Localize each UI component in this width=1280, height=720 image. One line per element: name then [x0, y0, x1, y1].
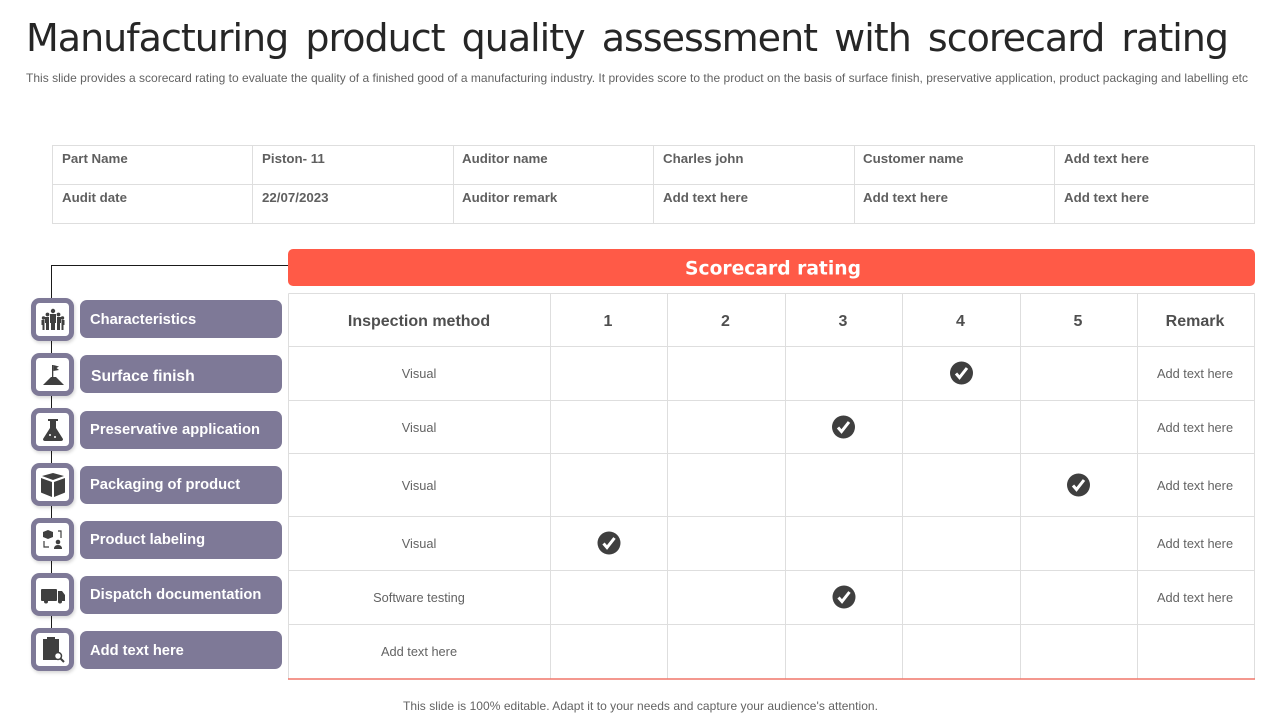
- icon: flask: [43, 419, 63, 441]
- audit details table: Part Name: [62, 151, 128, 166]
- audit details table: [52, 146, 1254, 224]
- scorecard table: 5: [1074, 313, 1083, 330]
- subtitle: This slide provides a scorecard rating to evaluate the quality of a finished good of a manufacturing industry. It provides score to the product on the basis of surface finish, preservative application, product packaging and labelling etc: [26, 71, 1248, 85]
- row: add text here: Add text here: [90, 643, 184, 659]
- icon: team: [42, 309, 64, 330]
- scorecard table: 2: [721, 313, 730, 330]
- icon: truck: [41, 589, 65, 604]
- row: packaging of product: [34, 466, 282, 504]
- scorecard table: Software testing: [373, 590, 465, 605]
- scorecard banner: Scorecard rating: [685, 258, 861, 280]
- title: Manufacturing product quality assessment with scorecard rating: [26, 16, 1229, 60]
- row: packaging of product: Packaging of product: [90, 477, 240, 493]
- connector line: [52, 266, 288, 650]
- icon: clipboard with magnifier: [43, 637, 64, 662]
- row: product labeling: Product labeling: [90, 532, 205, 548]
- scorecard table: Visual: [402, 536, 436, 551]
- icon: flag on mountain: [43, 365, 64, 385]
- scorecard table: 1: [604, 313, 613, 330]
- row: surface finish: [34, 355, 282, 394]
- scorecard table: Add text here: [381, 644, 457, 659]
- row: add text here: [34, 630, 282, 669]
- audit details table: Audit date: [62, 190, 127, 205]
- scorecard table: 4: [956, 313, 965, 330]
- audit details table: Add text here: [1064, 190, 1149, 205]
- audit details table: 22/07/2023: [262, 190, 329, 205]
- row: preservative application: Preservative application: [90, 422, 260, 438]
- row: dispatch documentation: [34, 576, 282, 614]
- audit details table: Add text here: [663, 190, 748, 205]
- icon: product and person exchange: [43, 530, 62, 549]
- audit details table: Customer name: [863, 151, 964, 166]
- scorecard table: Inspection method: [348, 313, 490, 330]
- row: characteristics: [34, 300, 282, 338]
- scorecard table: 3: [839, 313, 848, 330]
- scorecard table: Add text here: [1157, 478, 1233, 493]
- footer note: This slide is 100% editable. Adapt it to your needs and capture your audience's attention.: [403, 699, 878, 713]
- row: preservative application: [34, 410, 282, 449]
- scorecard table: Remark: [1166, 313, 1224, 330]
- scorecard table: Add text here: [1157, 536, 1233, 551]
- scorecard table: Add text here: [1157, 420, 1233, 435]
- scorecard table: Add text here: [1157, 590, 1233, 605]
- scorecard table: [288, 293, 1255, 679]
- audit details table: Auditor name: [462, 151, 548, 166]
- check marks: [598, 362, 1090, 608]
- icon: box: [41, 473, 65, 497]
- row: characteristics: Characteristics: [90, 312, 196, 328]
- scorecard table: Visual: [402, 420, 436, 435]
- scorecard banner: [288, 249, 1255, 286]
- scorecard table: Visual: [402, 366, 436, 381]
- row: product labeling: [34, 520, 282, 559]
- row: surface finish: Surface finish: [91, 368, 195, 385]
- row: dispatch documentation: Dispatch documentation: [90, 587, 261, 603]
- audit details table: Piston- 11: [262, 151, 325, 166]
- audit details table: Add text here: [1064, 151, 1149, 166]
- scorecard table: Add text here: [1157, 366, 1233, 381]
- scorecard table: Visual: [402, 478, 436, 493]
- audit details table: Auditor remark: [462, 190, 558, 205]
- audit details table: Charles john: [663, 151, 744, 166]
- audit details table: Add text here: [863, 190, 948, 205]
